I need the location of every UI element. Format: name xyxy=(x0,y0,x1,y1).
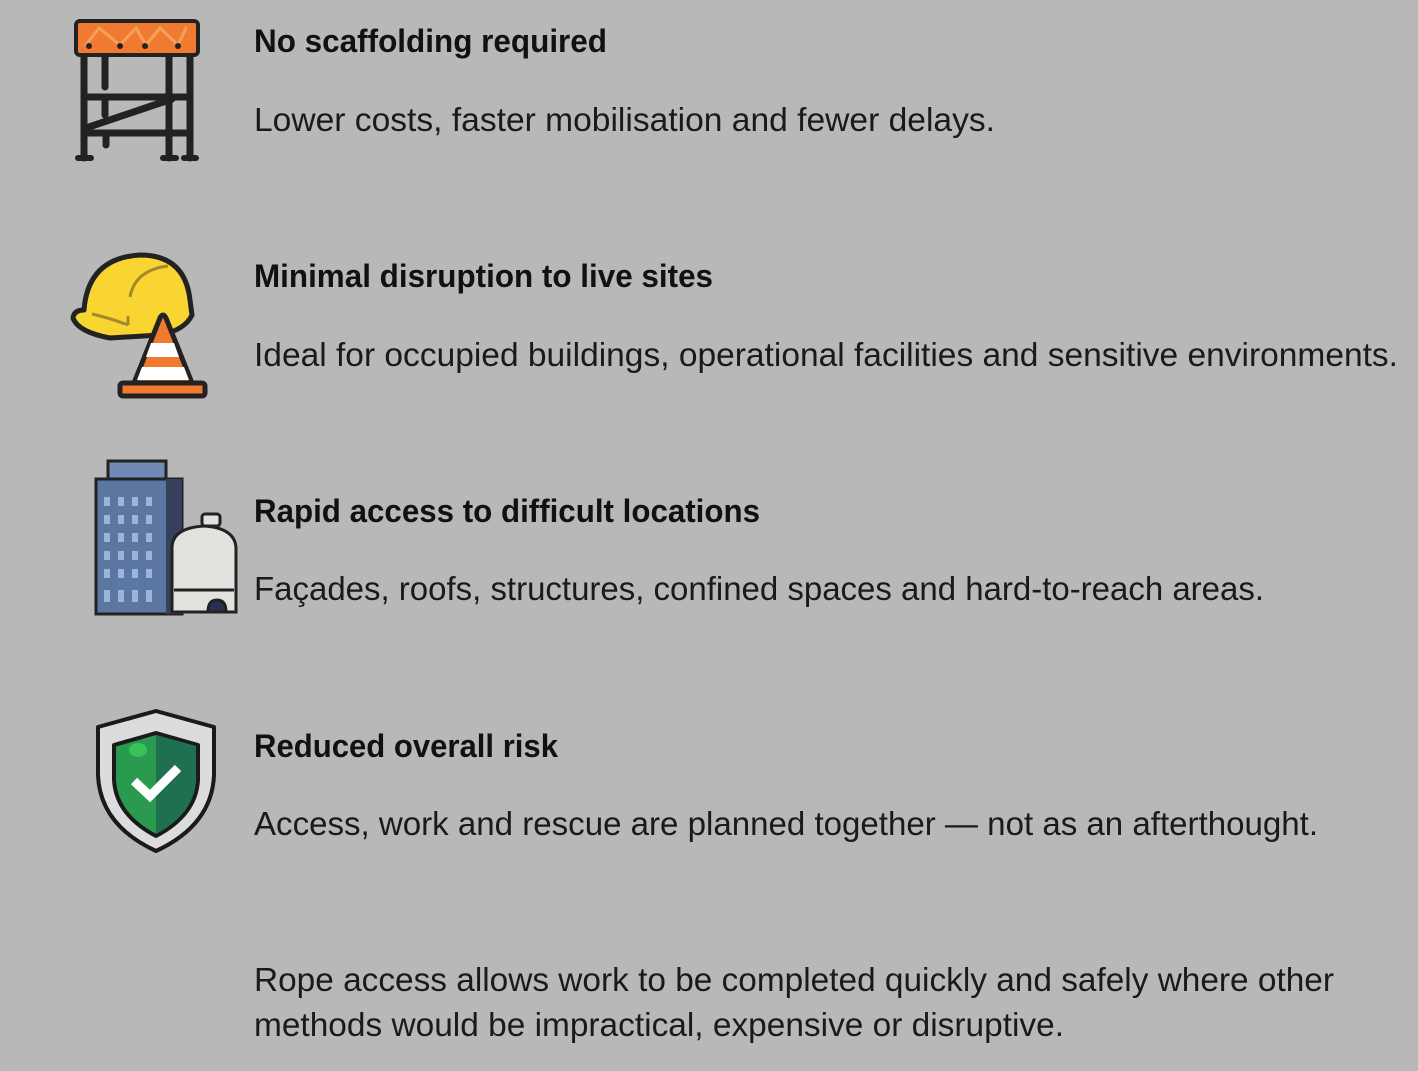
text: lower costs: Lower costs, faster mobilisation and fewer delays. xyxy=(254,101,995,138)
heading: reduced risk: Reduced overall risk xyxy=(254,728,558,764)
heading: no scaffolding: No scaffolding required xyxy=(254,23,607,59)
heading: minimal disruption: Minimal disruption to live sites xyxy=(254,258,713,294)
closing paragraph: Rope access allows work to be completed quickly and safely where other xyxy=(254,961,1334,998)
heading: rapid access: Rapid access to difficult locations xyxy=(254,493,760,529)
icon: scaffolding xyxy=(76,21,198,158)
icon: buildings xyxy=(96,461,236,614)
text: facades: Façades, roofs, structures, confined spaces and hard-to-reach areas. xyxy=(254,570,1264,607)
text: ideal for occupied: Ideal for occupied buildings, operational facilities and sensitive environments. xyxy=(254,336,1398,373)
icon: hard hat and cone xyxy=(73,255,205,396)
text: access work rescue: Access, work and rescue are planned together — not as an afterthought. xyxy=(254,805,1318,842)
icon: shield xyxy=(98,711,214,851)
closing paragraph: methods would be impractical, expensive or disruptive. xyxy=(254,1006,1064,1043)
closing paragraph xyxy=(254,961,1334,1043)
